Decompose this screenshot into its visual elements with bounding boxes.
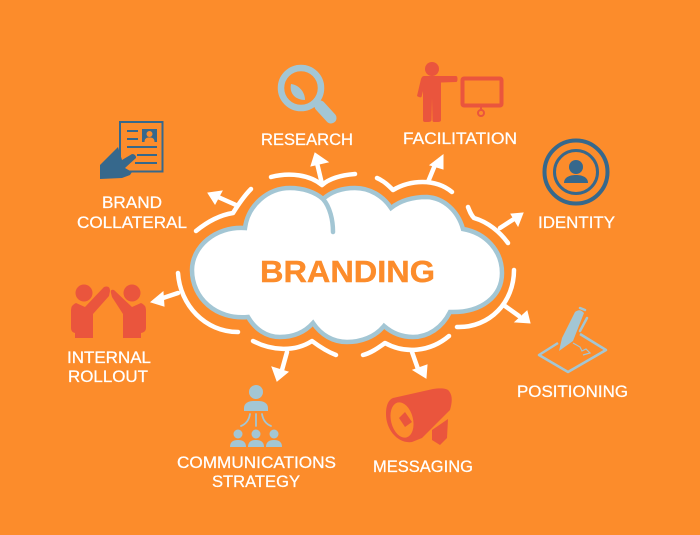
icon: positioning pen and paper xyxy=(539,308,606,372)
label: research: RESEARCH xyxy=(261,131,353,149)
icon: messaging megaphone xyxy=(386,388,452,445)
label: brand collateral: BRAND xyxy=(102,194,162,212)
label: communications strategy xyxy=(177,454,336,491)
cloud shape xyxy=(192,188,502,342)
label: positioning: POSITIONING xyxy=(517,383,628,401)
label: brand collateral xyxy=(77,194,187,232)
cloud with title xyxy=(192,188,502,342)
label: brand collateral: COLLATERAL xyxy=(77,214,187,232)
label: communications strategy: STRATEGY xyxy=(212,473,300,491)
label: internal rollout: INTERNAL xyxy=(67,349,151,367)
icon: facilitation presenter xyxy=(417,62,502,122)
arrow: to brand collateral xyxy=(196,189,251,231)
arrow: to communications strategy xyxy=(253,341,336,381)
icon: internal rollout high five xyxy=(71,284,146,338)
label: internal rollout: ROLLOUT xyxy=(68,368,148,386)
label: internal rollout xyxy=(67,349,151,386)
title: branding: BRANDING xyxy=(260,255,435,289)
icon: research magnifier xyxy=(281,68,331,118)
arrow: to internal rollout xyxy=(151,273,238,332)
arrow: to identity xyxy=(468,207,523,243)
label: messaging: MESSAGING xyxy=(373,458,473,476)
label: communications strategy: COMMUNICATIONS xyxy=(177,454,336,472)
arrow: to facilitation xyxy=(377,155,452,192)
label: facilitation: FACILITATION xyxy=(403,130,517,148)
icon: communications hierarchy xyxy=(230,385,282,447)
icon: brand collateral document in hand xyxy=(100,122,162,179)
arrow: to positioning xyxy=(457,270,530,327)
arrow: to messaging xyxy=(363,336,449,378)
arrow: to research xyxy=(271,153,355,185)
icon: identity badge xyxy=(544,140,608,204)
label: identity: IDENTITY xyxy=(538,214,615,232)
